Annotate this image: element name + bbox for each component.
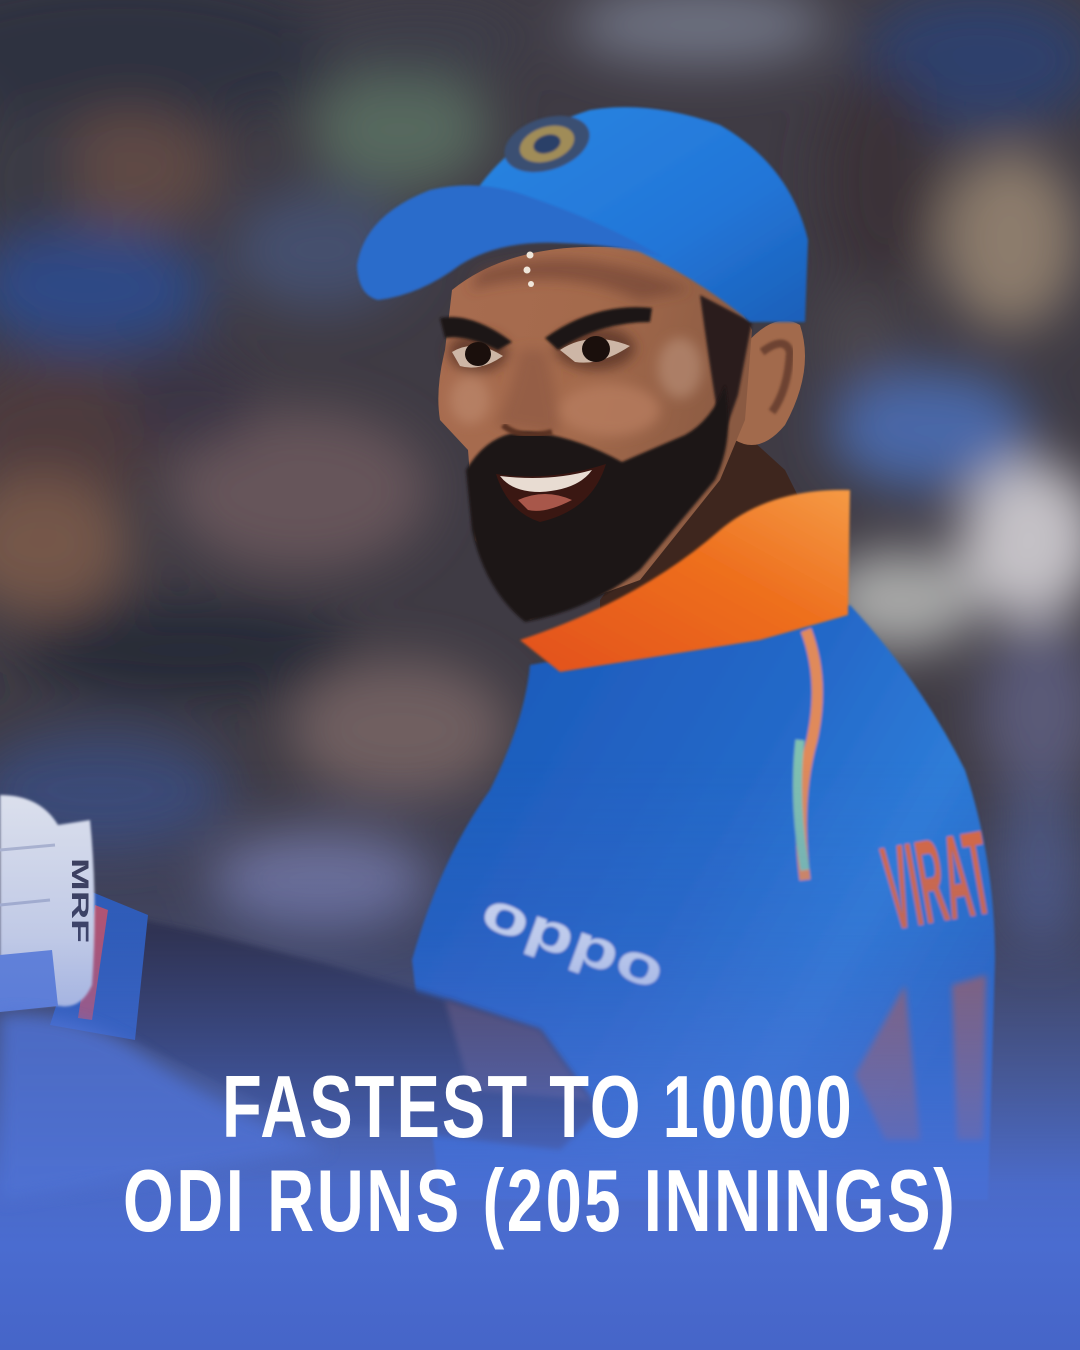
glove [0, 795, 95, 1010]
forearm [110, 915, 600, 1150]
beard [466, 385, 728, 622]
title line 2: ODI RUNS (205 INNINGS) [123, 1153, 955, 1250]
collar [520, 490, 850, 672]
title line 1: FASTEST TO 10000 [222, 1059, 852, 1156]
cap [357, 106, 808, 322]
ear [735, 320, 805, 445]
jersey number [855, 975, 986, 1140]
sponsor on sleeve: oppo [474, 880, 673, 1001]
lower left fade curve [0, 1015, 330, 1200]
tilak dots [524, 252, 534, 287]
cap badge [497, 106, 597, 182]
face [438, 247, 752, 620]
bottom gradient overlay [0, 760, 1080, 1350]
mouth [496, 464, 606, 522]
title [123, 1059, 955, 1250]
neck [600, 420, 800, 640]
eyebrows [440, 317, 512, 350]
hair at side [700, 295, 752, 440]
eyes [452, 346, 503, 368]
face shading [448, 259, 702, 436]
jersey [412, 605, 1000, 1200]
wrist band [50, 892, 148, 1040]
nose [503, 425, 552, 435]
player [0, 106, 1000, 1200]
glove logo: MRF [66, 858, 93, 943]
